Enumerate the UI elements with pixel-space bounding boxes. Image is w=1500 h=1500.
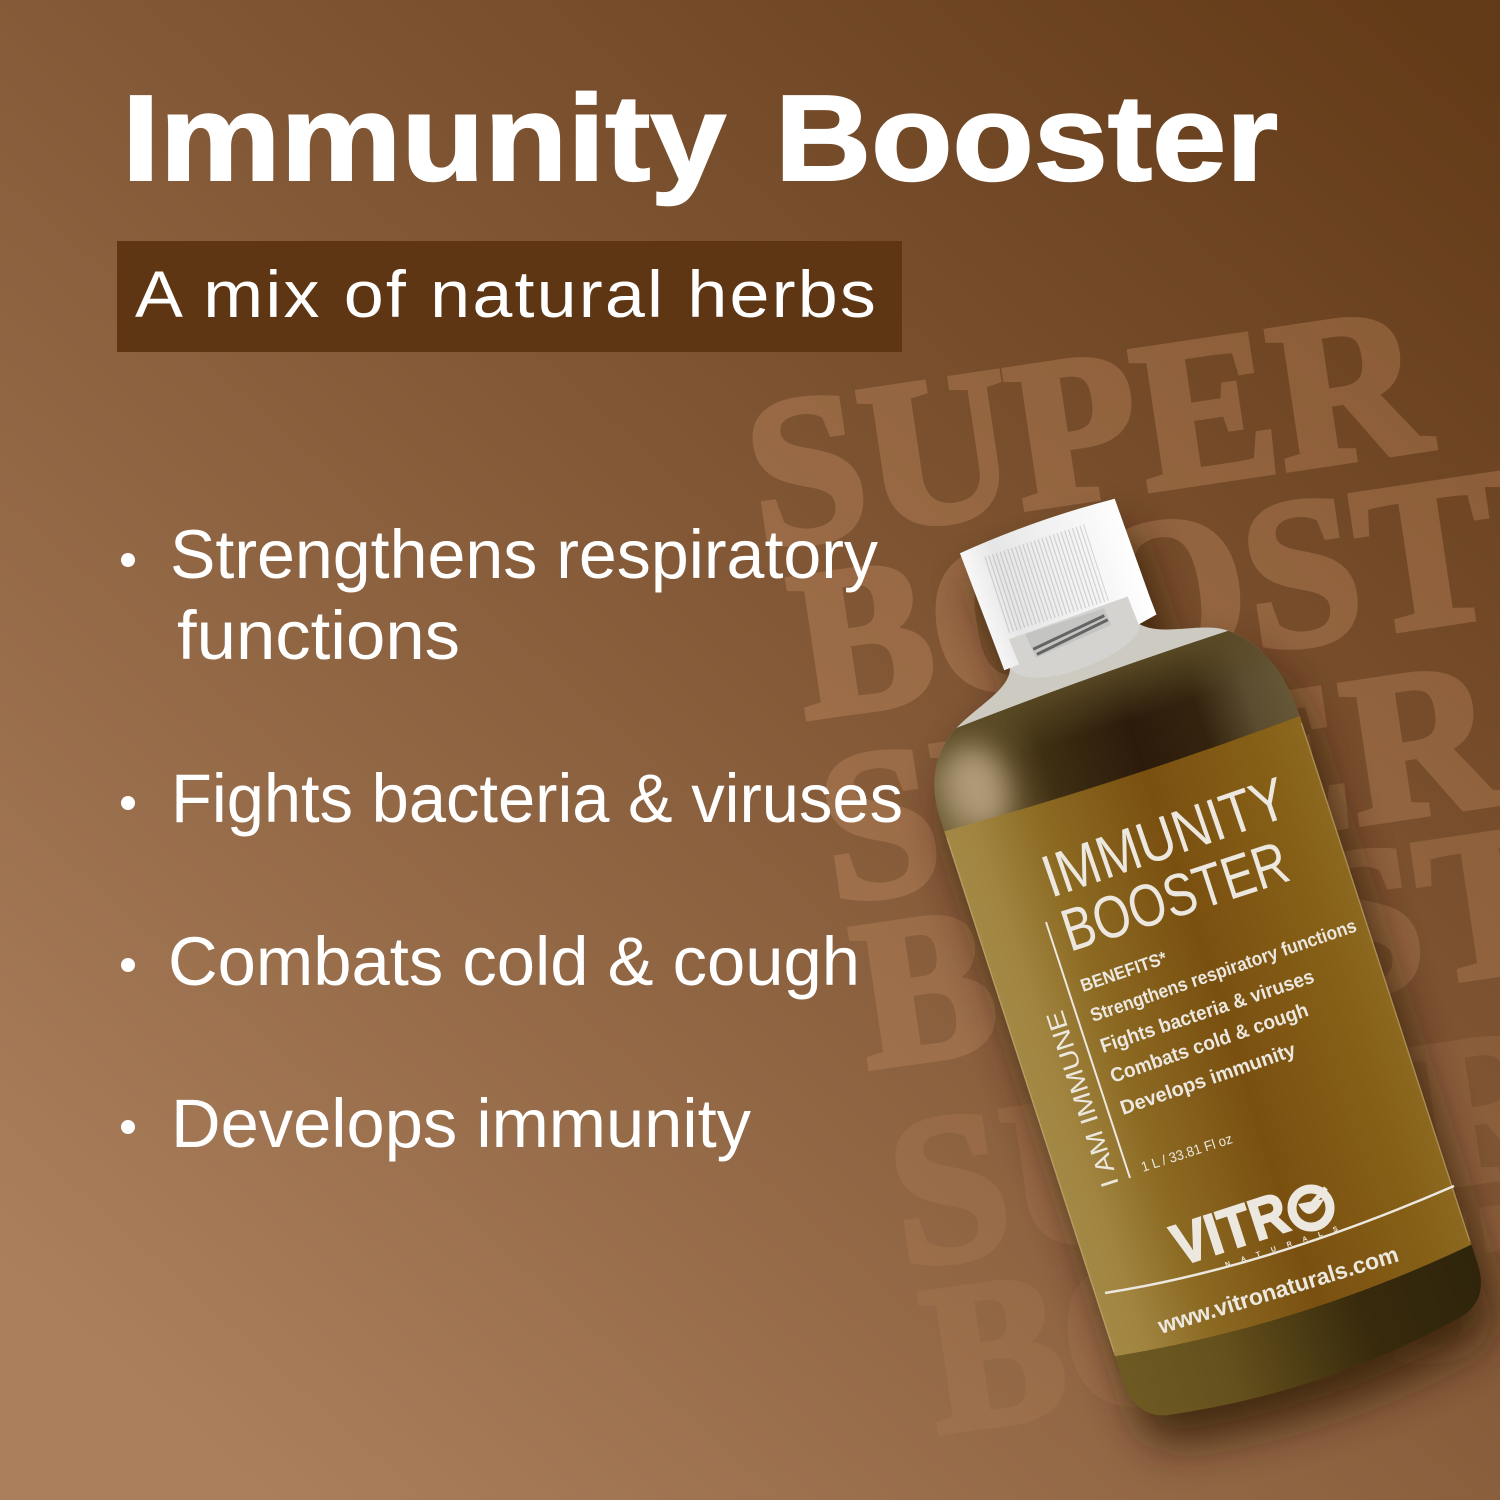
product name: IMMUNITY: [1033, 764, 1295, 910]
product name: [1033, 764, 1297, 964]
bullet: develops immunity: Develops immunity: [171, 1085, 751, 1162]
headspace: [939, 624, 1262, 756]
benefits on label: [1078, 916, 1359, 1120]
bottle: [877, 495, 1500, 1466]
curved rule: [1105, 1186, 1454, 1293]
bullet: strengthens respiratory functions: Strengthens respiratory: [170, 516, 878, 593]
upper liquid tint: [936, 631, 1262, 768]
subtitle banner: [117, 241, 902, 352]
title: Immunity: [122, 70, 726, 206]
label: [944, 716, 1472, 1356]
benefits list: [121, 516, 903, 1162]
watermark: repeated SUPER BOOSTER text: SUPER: [732, 260, 1441, 593]
bullet: strengthens respiratory functions: [121, 516, 878, 674]
liquid: [934, 631, 1300, 832]
highlight on the shoulder: [936, 739, 1019, 838]
logo: VITR: [1164, 1180, 1296, 1278]
benefits on label: Fights bacteria & viruses: [1098, 966, 1317, 1058]
vertical divider: [1046, 922, 1130, 1178]
cap: [958, 496, 1158, 672]
benefits on label: Develops immunity: [1117, 1039, 1299, 1120]
bullet: fights bacteria and viruses: Fights bacteria & viruses: [171, 760, 903, 837]
watermark: repeated SUPER BOOSTER text: [732, 208, 1500, 1485]
side tagline: I AM IMMUNE: [1041, 1007, 1125, 1191]
bullet: combats cold and cough: Combats cold & cough: [168, 923, 860, 1000]
logo: NATURALS: [1224, 1226, 1339, 1269]
website: www.vitronaturals.com: [1154, 1241, 1402, 1339]
bottom liquid: [1115, 1244, 1481, 1416]
product name: BOOSTER: [1053, 828, 1297, 964]
title: Booster: [775, 70, 1278, 206]
benefits on label: Strengthens respiratory functions: [1088, 916, 1359, 1027]
neck: [1000, 595, 1147, 690]
bottle body: [934, 624, 1481, 1416]
bullet: strengthens respiratory functions: functions: [177, 597, 460, 674]
subtitle banner: A mix of natural herbs: [135, 257, 878, 331]
title: [122, 70, 1278, 206]
glass edge highlight: [946, 723, 1471, 1357]
volume: 1 L / 33.81 Fl oz: [1139, 1130, 1234, 1175]
bottle shadow: [877, 495, 1500, 1466]
bottle label text: [1033, 764, 1454, 1339]
benefits on label: Combats cold & cough: [1107, 999, 1311, 1088]
benefits on label: BENEFITS*: [1078, 948, 1169, 996]
